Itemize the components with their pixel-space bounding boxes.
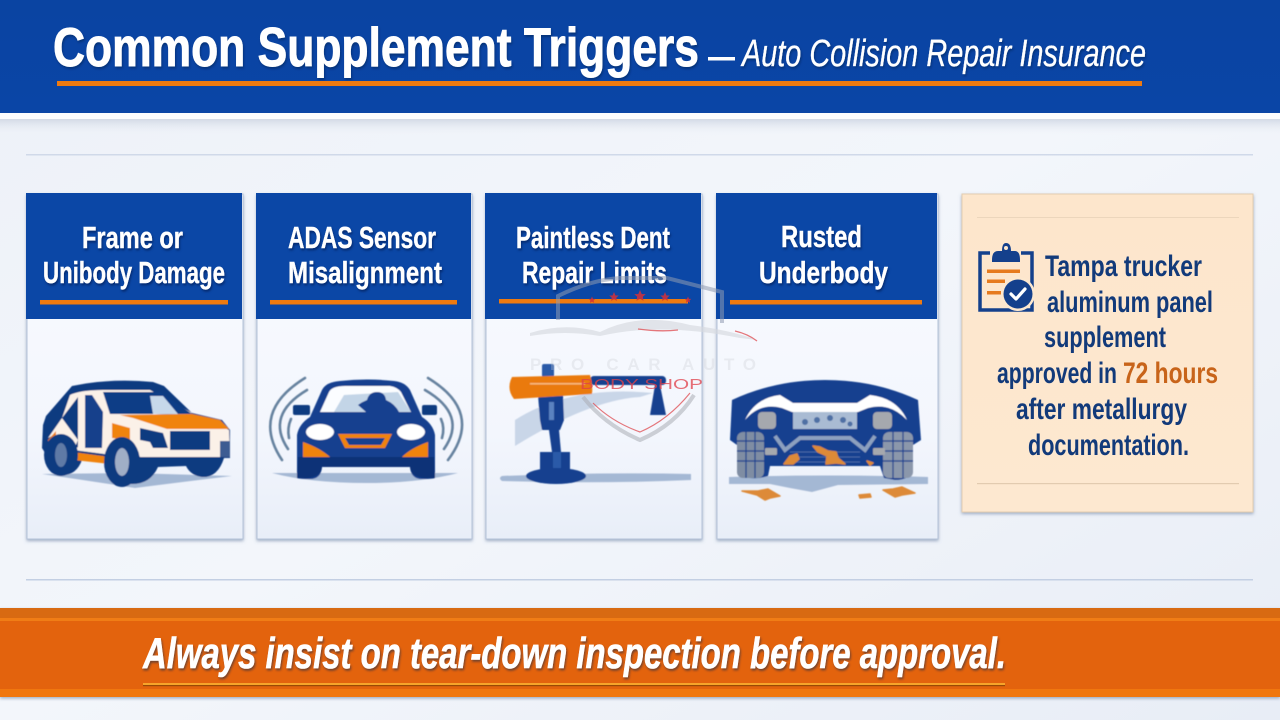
title: Common Supplement Triggers	[53, 16, 699, 78]
card heading: Repair Limits	[522, 255, 667, 290]
card heading	[516, 220, 670, 290]
icon: car with exposed frame	[42, 381, 232, 488]
callout text: documentation.	[1028, 429, 1189, 462]
card heading: Underbody	[759, 255, 889, 290]
callout panel: tampa trucker	[962, 194, 1253, 512]
card heading: Unibody Damage	[43, 255, 225, 290]
card heading	[288, 220, 442, 290]
callout text: supplement	[1044, 321, 1166, 354]
callout text: aluminum panel	[1047, 286, 1213, 319]
card heading: Rusted	[781, 219, 862, 254]
card: frame or unibody damage	[26, 193, 243, 539]
icon: rusted underbody	[729, 380, 928, 500]
header banner	[0, 0, 1280, 135]
footer message: Always insist on tear-down inspection before approval.	[142, 629, 1006, 678]
card: adas sensor misalignment	[256, 193, 472, 539]
card: rusted underbody	[716, 193, 938, 539]
watermark tagline: BODY SHOP	[580, 376, 703, 393]
watermark logo	[530, 278, 757, 440]
title dash	[708, 57, 735, 60]
card: paintless dent repair limits	[485, 193, 702, 539]
callout text: approved in	[997, 357, 1117, 390]
callout text: after metallurgy	[1016, 393, 1187, 426]
icon: clipboard with check	[980, 243, 1035, 311]
card heading	[759, 219, 889, 290]
footer underline	[143, 683, 1005, 686]
card heading: Frame or	[82, 220, 183, 255]
callout text: 72 hours	[1123, 357, 1218, 390]
icon: dent repair tool	[500, 364, 691, 484]
card heading	[43, 220, 225, 290]
title underline	[57, 81, 1142, 86]
footer banner	[0, 608, 1280, 697]
card heading: Misalignment	[288, 255, 442, 290]
callout text: Tampa trucker	[1045, 250, 1202, 283]
card heading: Paintless Dent	[516, 220, 670, 255]
card heading: ADAS Sensor	[288, 220, 436, 255]
subtitle: Auto Collision Repair Insurance	[740, 33, 1146, 75]
callout text	[997, 250, 1218, 462]
icon: car with sensor waves	[270, 378, 462, 483]
watermark name: PRO CAR AUTO	[530, 355, 756, 374]
